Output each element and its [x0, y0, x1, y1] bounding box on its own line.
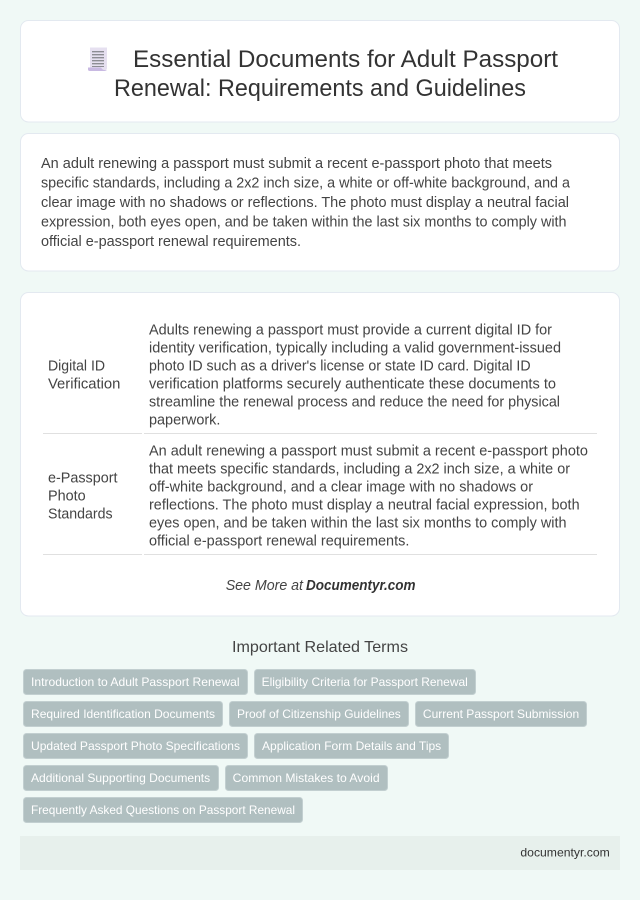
chip: Current Passport Submission [423, 707, 579, 721]
row text: Digital ID description: paperwork. [149, 412, 220, 428]
row label: Digital ID Verification: Digital ID [48, 358, 105, 374]
text block: summary: clear image with no shadows or reflections. The photo must display a neutral facial [41, 195, 569, 211]
row text: Digital ID description [149, 322, 561, 428]
chip [416, 702, 586, 726]
link: see more: Documentyr.com [306, 578, 416, 594]
table row: e-Passport Photo Standards [43, 443, 597, 555]
chip [24, 766, 218, 790]
row label: Digital ID Verification: Verification [48, 376, 120, 392]
panel: details table [20, 292, 620, 616]
row text: e-Passport description: official e-passport renewal requirements. [149, 533, 409, 549]
text block: summary: expression, both eyes open, and be taken within the last six months to comply with [41, 214, 566, 230]
row text: e-Passport description: An adult renewing a passport must submit a recent e-passport photo [149, 443, 588, 459]
chip: Common Mistakes to Avoid [233, 771, 380, 785]
row text: Digital ID description: photo ID such as a driver's license or state ID card. Digital ID [149, 358, 531, 374]
chip: Introduction to Adult Passport Renewal [31, 675, 240, 689]
chip: Eligibility Criteria for Passport Renewal [262, 675, 468, 689]
row text: e-Passport description: that meets specific standards, including a 2x2 inch size, a white or [149, 461, 570, 477]
text block: summary [41, 156, 570, 250]
chip: Additional Supporting Documents [31, 771, 210, 785]
link: see more: See More at [226, 578, 304, 594]
text block: summary: official e-passport renewal requirements. [41, 234, 301, 250]
row text: Digital ID description: Adults renewing a passport must provide a current digital ID for [149, 322, 552, 338]
title: Renewal: Requirements and Guidelines [114, 75, 526, 102]
row text: e-Passport description [149, 443, 588, 549]
panel: summary paragraph [20, 134, 620, 271]
row label: e-Passport Photo Standards: Photo [48, 488, 86, 504]
chip [24, 702, 222, 726]
row text: e-Passport description: eyes open, and be taken within the last six months to comply with [149, 515, 566, 531]
row text: Digital ID description: verification platforms securely authenticate these documents to [149, 376, 556, 392]
title: Essential Documents for Adult Passport [133, 46, 558, 73]
table row: Digital ID Verification [43, 322, 597, 434]
link: see more [226, 578, 416, 594]
chip [254, 734, 448, 758]
chip: Proof of Citizenship Guidelines [237, 707, 401, 721]
text block: summary: An adult renewing a passport must submit a recent e-passport photo that meets [41, 156, 552, 172]
icon: receipt document [88, 48, 107, 71]
row text: Digital ID description: streamline the renewal process and reduce the need for physical [149, 394, 560, 410]
chip: Updated Passport Photo Specifications [31, 739, 240, 753]
panel: related term chips [24, 670, 586, 822]
panel: title card [20, 20, 620, 122]
chip [24, 670, 248, 694]
chip [254, 670, 476, 694]
row label: e-Passport Photo Standards: e-Passport [48, 470, 118, 486]
row text: Digital ID description: identity verification, typically including a valid government-issued [149, 340, 561, 356]
row label: e-Passport Photo Standards [48, 470, 118, 522]
chip: Required Identification Documents [31, 707, 215, 721]
chip: Application Form Details and Tips [262, 739, 441, 753]
chip [24, 798, 302, 822]
chip: Frequently Asked Questions on Passport Renewal [31, 803, 295, 817]
chip [24, 734, 248, 758]
footer [20, 836, 620, 870]
chip [230, 702, 408, 726]
row label: e-Passport Photo Standards: Standards [48, 506, 113, 522]
row label: Digital ID Verification [48, 358, 120, 392]
title [114, 46, 558, 102]
text block: summary: specific standards, including a 2x2 inch size, a white or off-white background, and a [41, 176, 570, 192]
chip [226, 766, 388, 790]
row text: e-Passport description: reflections. The photo must display a neutral facial expression, both [149, 497, 580, 513]
row text: e-Passport description: off-white background, and a clear image with no shadows or [149, 479, 533, 495]
footer: documentyr.com [520, 846, 610, 860]
heading: Important Related Terms: Important Related Terms [232, 639, 408, 656]
